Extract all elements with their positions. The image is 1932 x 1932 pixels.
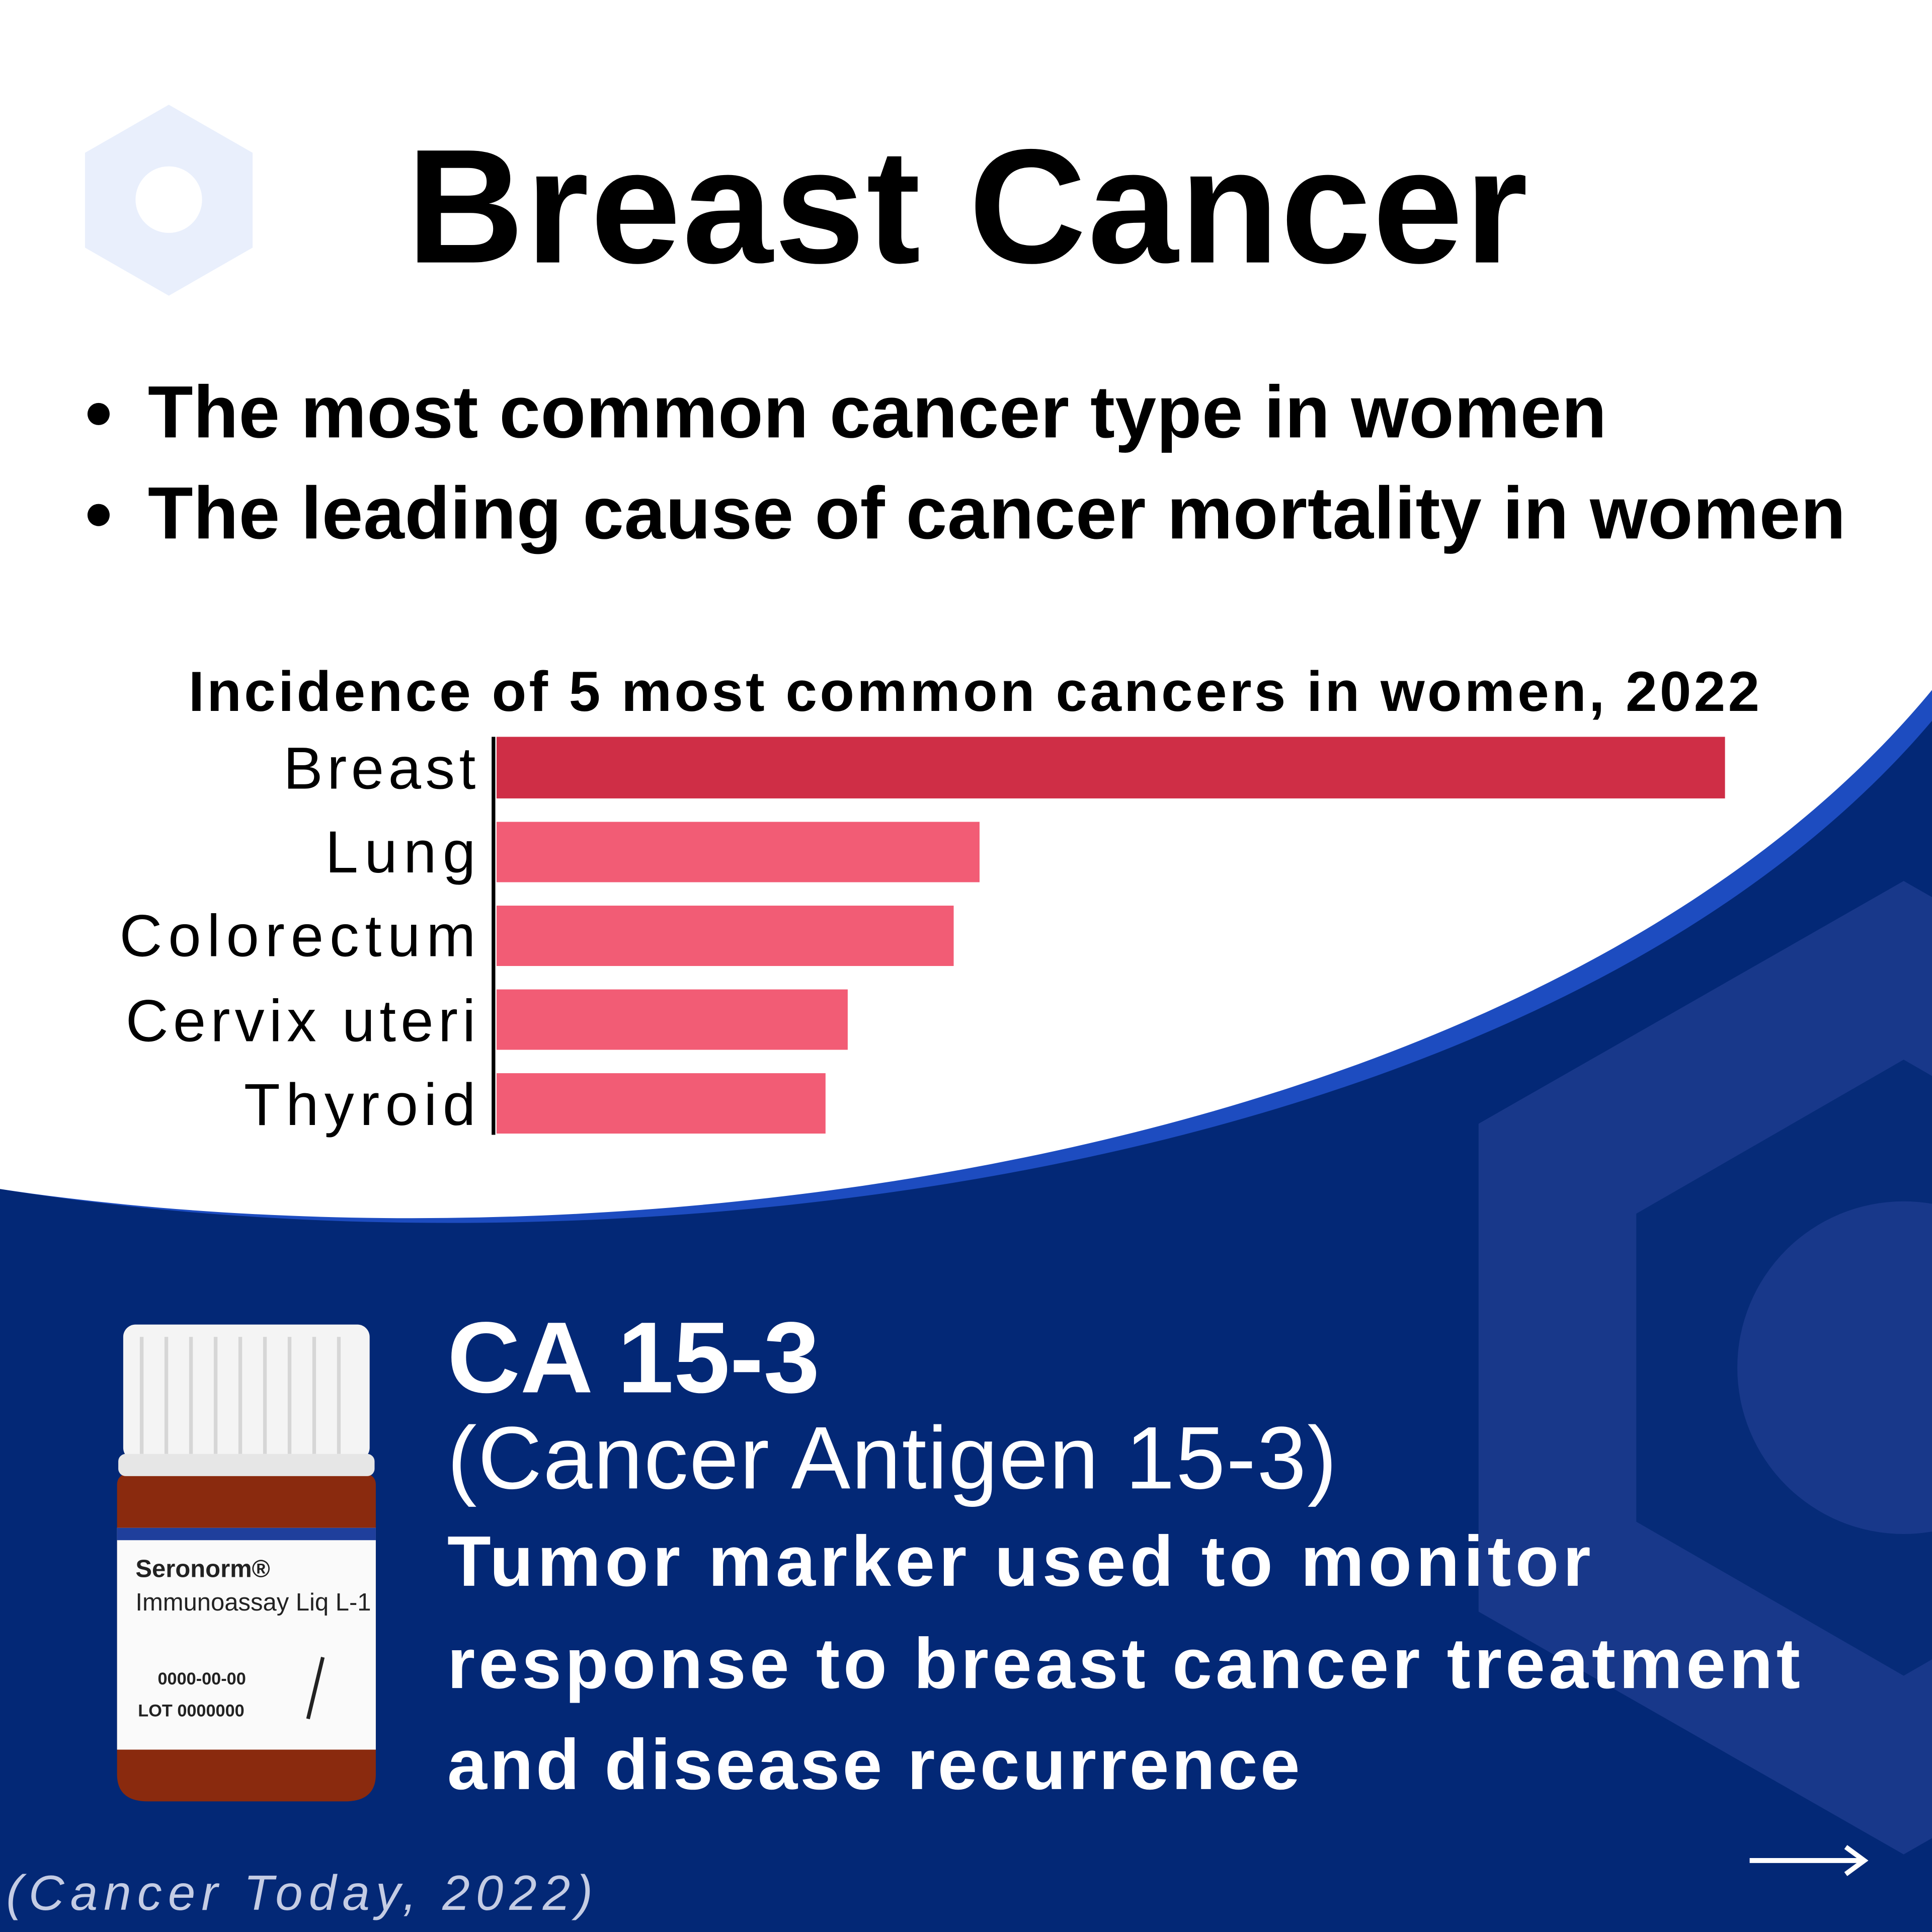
description text: Tumor marker used to monitor <box>447 1521 1591 1601</box>
arrow <box>1750 1847 1864 1874</box>
icon: product bottle: LOT 0000000 <box>138 1701 245 1720</box>
bar chart: Lung <box>326 819 475 885</box>
bar chart: Colorectum <box>120 903 475 969</box>
heading: CA 15-3: CA 15-3 <box>447 1301 820 1414</box>
title: Breast Cancer <box>407 115 1528 297</box>
background: blue wave <box>0 690 1932 1932</box>
icon: product bottle: Seronorm® <box>135 1556 270 1583</box>
icon: product bottle: Immunoassay Liq L-1 <box>135 1589 371 1616</box>
bullet list: The most common cancer type in women <box>148 371 1606 453</box>
description text: and disease recurrence <box>447 1725 1300 1805</box>
icon: product bottle: 0000-00-00 <box>157 1669 246 1688</box>
icon: product bottle <box>117 1325 376 1801</box>
bar chart: Breast <box>283 735 475 801</box>
description text: response to breast cancer treatment <box>447 1624 1800 1704</box>
bar chart: Cervix uteri <box>126 988 475 1054</box>
bar chart: Thyroid <box>244 1072 475 1138</box>
icon: small hexagon logo <box>85 105 253 296</box>
bullet list: The leading cause of cancer mortality in women <box>148 472 1846 554</box>
bullet list <box>88 371 1846 554</box>
citation: (Cancer Today, 2022) <box>6 1865 593 1920</box>
bar chart <box>120 735 1725 1138</box>
subheading: (Cancer Antigen 15-3) <box>447 1408 1337 1507</box>
description text <box>447 1521 1800 1805</box>
icon: large hexagon decoration <box>1479 881 1932 1855</box>
chart title: Incidence of 5 most common cancers in women, 2022 <box>189 660 1759 723</box>
